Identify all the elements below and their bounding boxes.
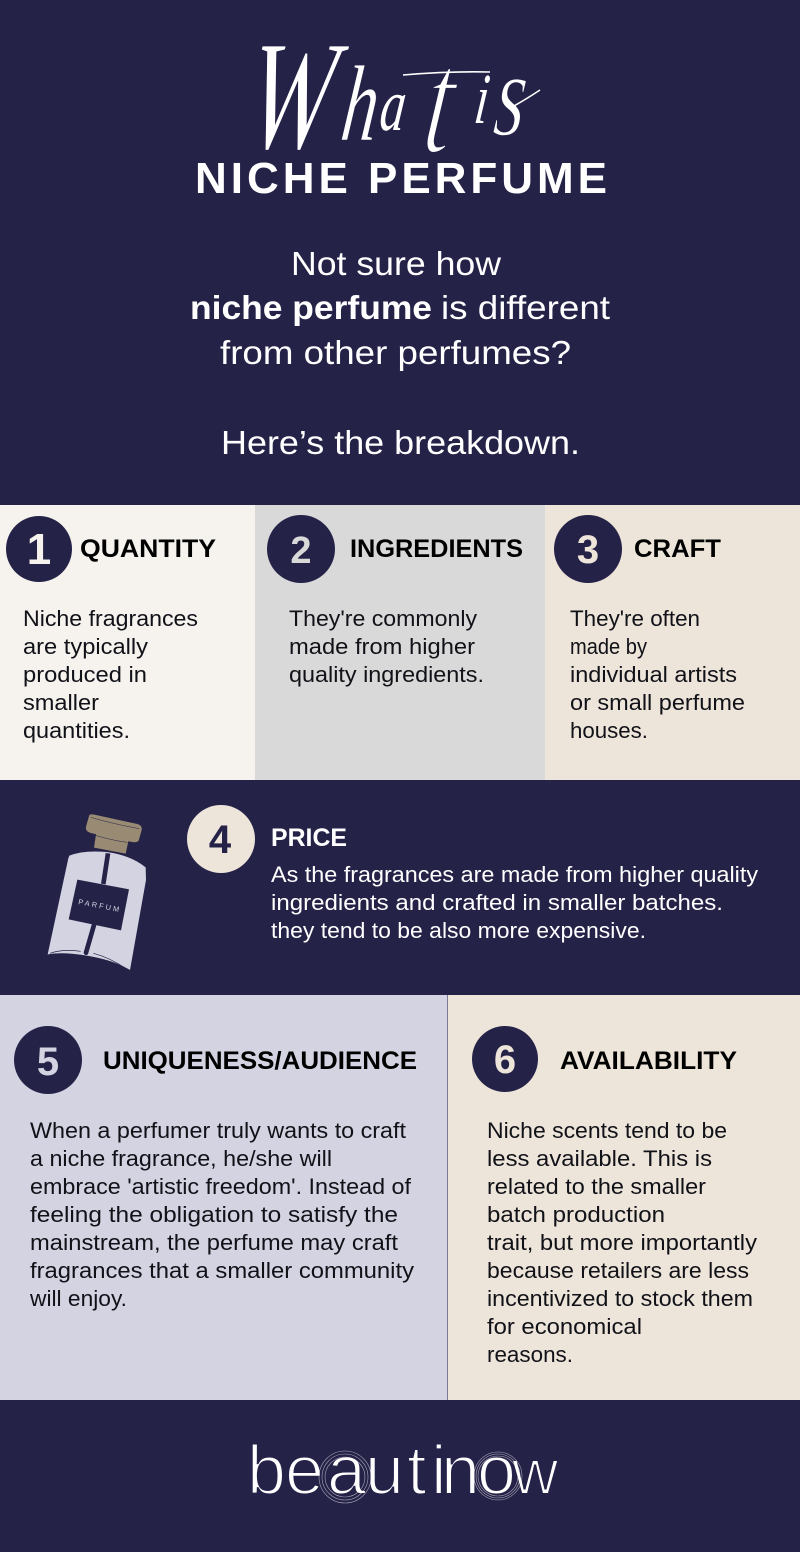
body: quantity: smaller	[23, 690, 99, 715]
intro text: from other perfumes?	[220, 334, 571, 371]
body: uniqueness and audience: fragrances that a smaller community	[30, 1258, 414, 1283]
number badge 1	[6, 516, 72, 582]
intro text: Not sure how	[291, 245, 501, 282]
body: price: ingredients and crafted in smaller batches.	[271, 890, 723, 915]
body: quantity: produced in	[23, 662, 147, 687]
body: ingredients: quality ingredients.	[289, 662, 484, 687]
logo: beautinow: beautino	[247, 1431, 516, 1509]
body: availability: less available. This is	[487, 1146, 712, 1171]
number badge 2: 2	[290, 530, 312, 572]
body: quantity: are typically	[23, 634, 148, 659]
number badge 5	[14, 1026, 82, 1094]
heading: uniqueness and audience: UNIQUENESS/AUDIENCE	[103, 1047, 417, 1075]
intro text: is different	[441, 289, 610, 326]
panel: availability	[448, 995, 800, 1400]
body: availability: incentivized to stock them	[487, 1286, 753, 1311]
panel: ingredients	[255, 505, 545, 780]
body: availability: trait, but more importantly	[487, 1230, 757, 1255]
body: availability: batch production	[487, 1202, 665, 1227]
number badge 3	[554, 515, 622, 583]
body: quantity	[23, 606, 198, 743]
heading: price: PRICE	[271, 824, 347, 852]
body: availability	[487, 1118, 757, 1367]
body: craft	[570, 606, 745, 743]
body: uniqueness and audience: a niche fragrance, he/she will	[30, 1146, 332, 1171]
body: availability: for economical	[487, 1314, 642, 1339]
panel: price	[48, 805, 758, 970]
body: craft: individual artists	[570, 662, 737, 687]
number badge 2	[267, 515, 335, 583]
body: uniqueness and audience: embrace 'artistic freedom'. Instead of	[30, 1174, 412, 1199]
number badge 3: 3	[577, 528, 599, 572]
intro text	[190, 245, 610, 461]
panel: craft	[545, 505, 800, 780]
logo: beautinow: w	[511, 1436, 559, 1508]
script heading: h	[336, 44, 386, 163]
body: availability: related to the smaller	[487, 1174, 706, 1199]
body: price	[271, 862, 758, 943]
script heading: s	[488, 30, 535, 162]
body: craft: made by	[570, 634, 647, 659]
title: What is Niche Perfume	[195, 9, 607, 203]
body: uniqueness and audience: mainstream, the perfume may craft	[30, 1230, 398, 1255]
heading: quantity: QUANTITY	[80, 535, 216, 563]
body: availability: reasons.	[487, 1342, 573, 1367]
number badge 1: 1	[27, 525, 51, 574]
main heading: NICHE PERFUME	[195, 154, 607, 203]
body: price: As the fragrances are made from higher quality	[271, 862, 758, 887]
body: availability: Niche scents tend to be	[487, 1118, 727, 1143]
body: craft: They're often	[570, 606, 700, 631]
body: price: they tend to be also more expensive.	[271, 918, 646, 943]
number badge 6: 6	[494, 1038, 516, 1082]
body: availability: because retailers are less	[487, 1258, 749, 1283]
heading: craft: CRAFT	[634, 535, 721, 563]
number badge 4: 4	[209, 818, 232, 862]
intro text: niche perfume	[190, 289, 432, 326]
body: ingredients: They're commonly	[289, 606, 477, 631]
body: ingredients	[289, 606, 484, 687]
script heading: t	[417, 19, 489, 185]
icon: perfume bottle	[48, 814, 146, 970]
panel: quantity	[0, 505, 255, 780]
number badge 6	[472, 1026, 538, 1092]
body: uniqueness and audience: When a perfumer truly wants to craft	[30, 1118, 406, 1143]
script heading	[239, 9, 540, 185]
heading: ingredients: INGREDIENTS	[350, 535, 523, 563]
intro text: Here’s the breakdown.	[221, 424, 580, 461]
body: uniqueness and audience: feeling the obligation to satisfy the	[30, 1202, 398, 1227]
script heading: W	[239, 9, 355, 182]
body: uniqueness and audience: will enjoy.	[29, 1286, 127, 1311]
body: craft: houses.	[570, 718, 648, 743]
script heading: a	[376, 63, 411, 146]
script heading: i	[471, 60, 494, 139]
body: ingredients: made from higher	[289, 634, 475, 659]
icon: perfume bottle: PARFUM	[78, 897, 120, 914]
body: craft: or small perfume	[570, 690, 745, 715]
body: quantity: quantities.	[23, 718, 130, 743]
panel: uniqueness and audience	[0, 995, 448, 1400]
body: quantity: Niche fragrances	[23, 606, 198, 631]
body: uniqueness and audience	[29, 1118, 414, 1311]
number badge 5: 5	[37, 1040, 59, 1084]
number badge 4	[187, 805, 255, 873]
heading: availability: AVAILABILITY	[560, 1047, 737, 1075]
